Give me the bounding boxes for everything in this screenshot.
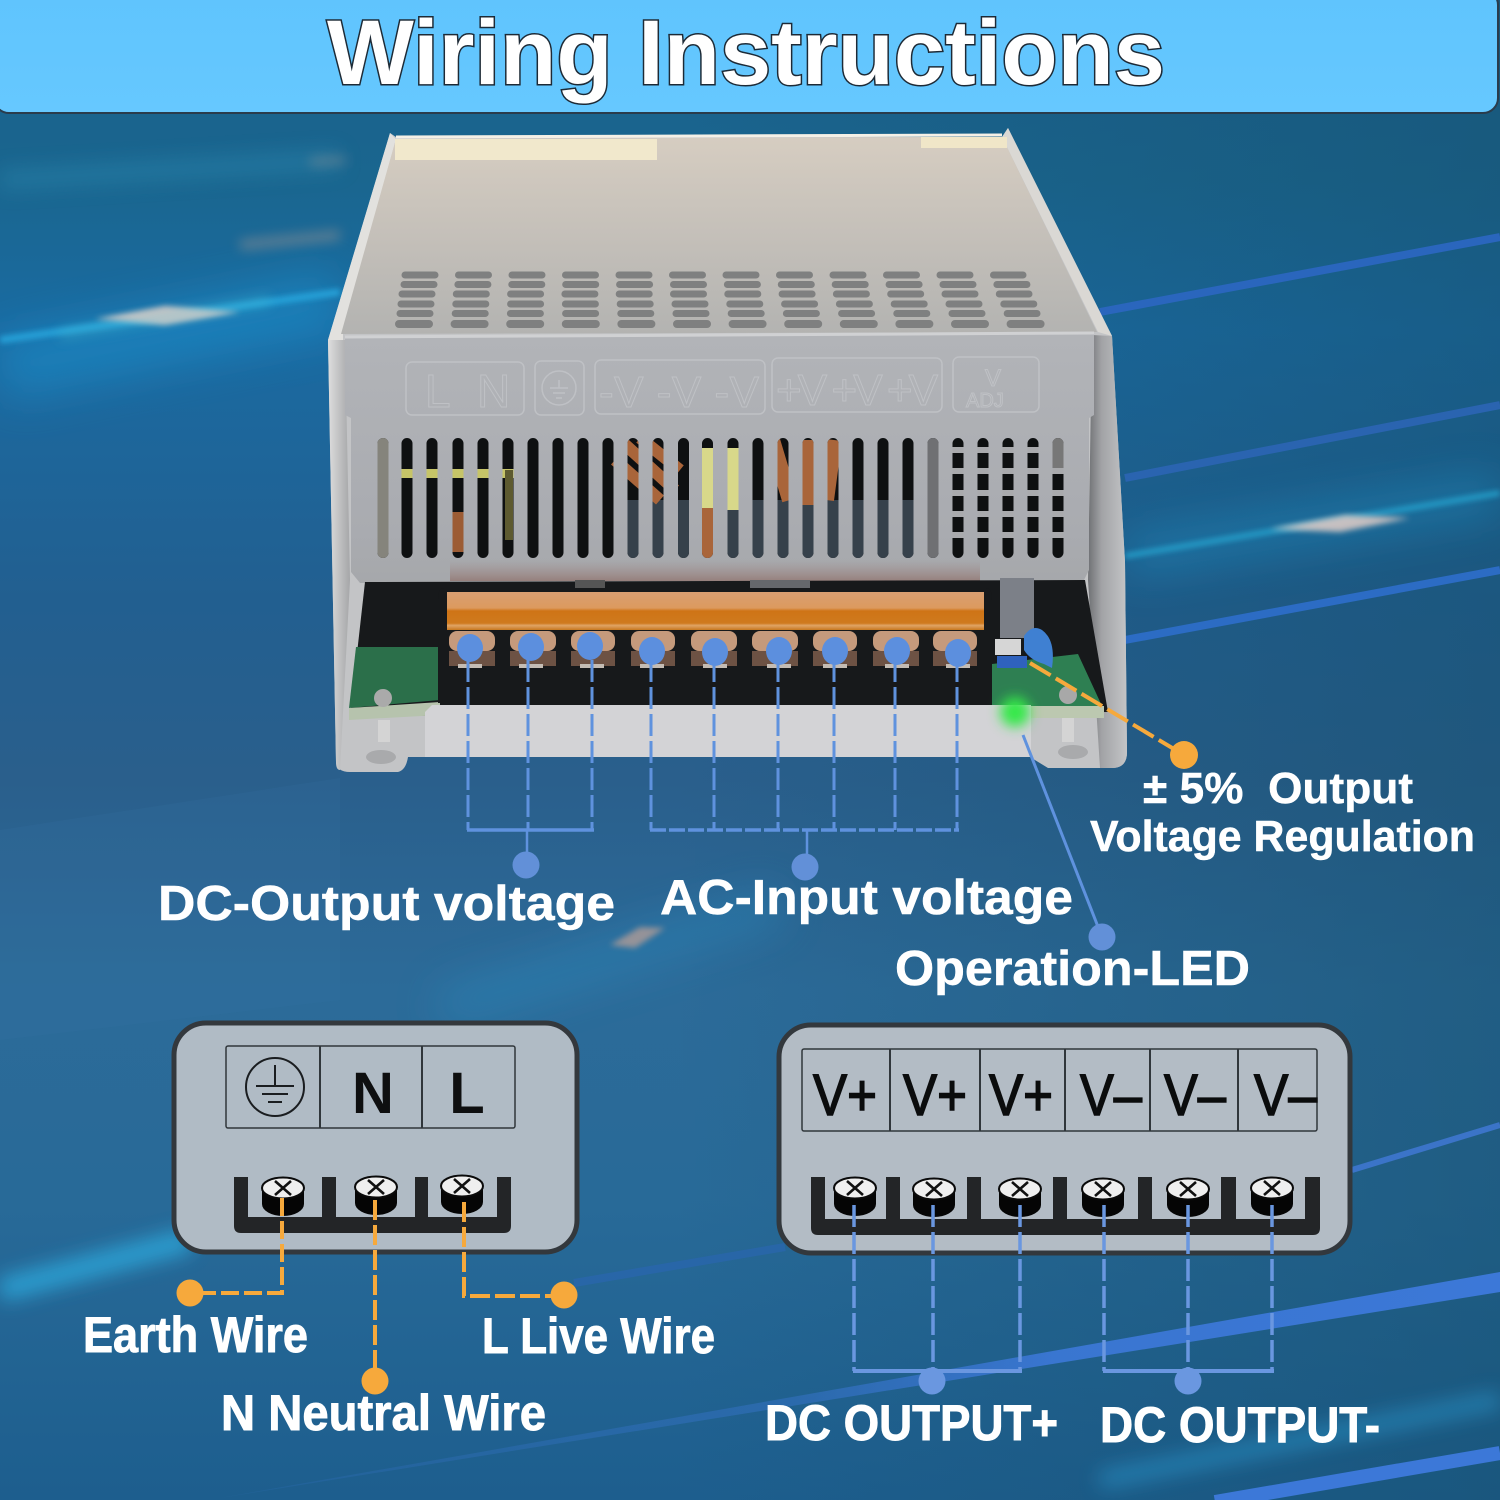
green LED glow <box>1000 697 1030 727</box>
lid <box>341 137 1097 334</box>
panel: AC terminal diagram <box>174 1023 577 1252</box>
header bar <box>0 0 1498 113</box>
AC terminal comb <box>234 1177 511 1233</box>
upper terminal wires <box>457 632 1198 950</box>
left side column <box>328 340 350 770</box>
embossed terminal labels: N <box>477 365 510 417</box>
label: voltage regulation: ± 5% Output <box>1143 764 1413 813</box>
DC label boxes: V+ <box>903 1063 967 1128</box>
earth marker <box>176 1280 204 1306</box>
DC label boxes: V– <box>1164 1063 1227 1128</box>
icon: earth symbol <box>246 1058 304 1116</box>
voltage regulation marker <box>1170 741 1198 769</box>
DC output marker <box>512 852 540 878</box>
blue capacitor <box>1024 628 1053 668</box>
right flange <box>1002 128 1112 336</box>
AC wiring leaders <box>176 1198 578 1394</box>
label: neutral wire: N Neutral Wire <box>221 1385 546 1441</box>
connector <box>995 639 1021 655</box>
earth wire leader <box>190 1198 282 1293</box>
embossed terminal labels: L <box>425 365 451 417</box>
live marker <box>550 1282 578 1308</box>
DC terminal comb <box>811 1177 1320 1235</box>
terminal block <box>438 588 992 703</box>
right side column <box>1088 335 1127 768</box>
orange cover <box>447 592 984 630</box>
terminal screws <box>449 631 977 666</box>
voltage regulation leader <box>1030 663 1184 755</box>
label: DC output positive: DC OUTPUT+ <box>765 1395 1058 1451</box>
lid ventilation holes <box>399 275 1041 324</box>
AC label boxes: N <box>352 1061 394 1126</box>
label: DC output voltage: DC-Output voltage <box>158 877 615 931</box>
DC label boxes: V– <box>1080 1063 1143 1128</box>
label: DC output negative: DC OUTPUT- <box>1100 1397 1380 1453</box>
base plate <box>425 705 1031 757</box>
DC positive marker <box>918 1368 946 1394</box>
neutral marker <box>362 1368 388 1394</box>
AC input wire group <box>650 660 959 866</box>
left flange <box>328 133 396 340</box>
LED marker <box>1088 924 1116 950</box>
DC label boxes: V– <box>1254 1063 1318 1128</box>
DC label boxes <box>802 1049 1318 1131</box>
label: live wire: L Live Wire <box>482 1308 715 1364</box>
screw washers <box>458 664 970 668</box>
embossed terminal labels <box>406 357 1039 417</box>
panel: DC terminal diagram <box>779 1025 1350 1253</box>
device outer shell <box>328 128 1127 772</box>
left circuit board <box>349 647 440 742</box>
embossed terminal labels: +V +V +V <box>776 366 939 415</box>
AC screws <box>262 1176 483 1216</box>
AC input marker <box>792 854 818 880</box>
trimmer <box>997 656 1027 668</box>
DC positive leaders <box>853 1205 1022 1371</box>
DC negative marker <box>1174 1368 1202 1394</box>
DC wiring leaders <box>853 1205 1274 1394</box>
DC label boxes: V+ <box>989 1063 1053 1128</box>
front panel <box>345 333 1094 583</box>
DC screws <box>834 1178 1293 1217</box>
DC output wire group <box>467 660 594 866</box>
embossed terminal labels: ADJ <box>966 390 1004 412</box>
embossed terminal labels: -V -V -V <box>599 368 760 417</box>
mounting holes <box>366 745 1088 764</box>
label: earth wire: Earth Wire <box>83 1307 308 1363</box>
LED leader line <box>1023 735 1102 937</box>
DC negative leaders <box>1103 1205 1274 1371</box>
label: AC input voltage: AC-Input voltage <box>660 871 1073 925</box>
title: Wiring Instructions <box>327 2 1165 104</box>
DC label boxes: V+ <box>813 1063 877 1128</box>
right circuit board <box>992 654 1104 742</box>
label: voltage regulation: Voltage Regulation <box>1090 812 1475 861</box>
interior cavity <box>350 580 1108 716</box>
AC label boxes <box>226 1046 515 1128</box>
terminal markers <box>457 632 971 667</box>
AC label boxes: L <box>449 1061 485 1126</box>
neutral wire leader <box>373 1200 377 1380</box>
live wire leader <box>464 1202 564 1296</box>
embossed terminal labels: V <box>985 365 1001 392</box>
label: operation LED: Operation-LED <box>895 942 1250 996</box>
label: voltage regulation <box>1090 764 1475 861</box>
lid highlights <box>395 135 1007 160</box>
ventilation slots with internals <box>378 438 1064 558</box>
power supply device <box>328 128 1127 772</box>
